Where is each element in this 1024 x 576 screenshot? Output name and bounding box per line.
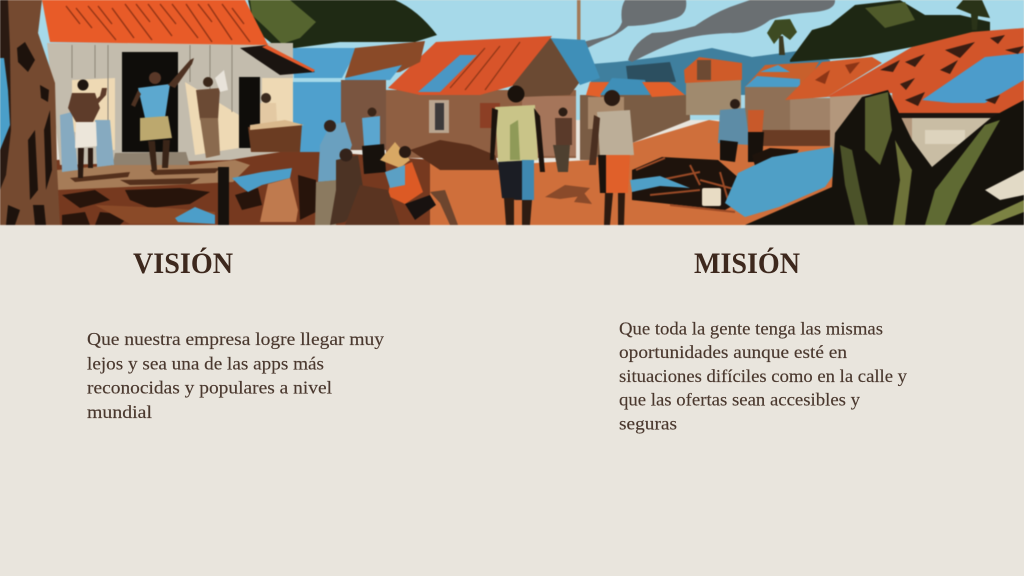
fence post	[218, 167, 229, 225]
trees behind houses, right	[790, 0, 990, 62]
palm tree	[767, 19, 797, 55]
body text: visión: reconocidas y populares a nivel	[87, 378, 332, 398]
dark mound behind tarp	[752, 148, 799, 166]
seated woman in orange	[345, 142, 458, 225]
person: man in blue shirt with raised arm	[131, 58, 194, 172]
porch steps	[113, 152, 190, 166]
yard shadow streaks	[70, 168, 220, 185]
jug	[702, 188, 721, 206]
body text: visión: lejos y sea una de las apps más	[87, 353, 324, 373]
orange mid house	[684, 57, 742, 115]
sack	[260, 178, 298, 222]
debris pile	[632, 157, 756, 212]
blue tarp scrap, left	[175, 207, 215, 224]
darker hill shade	[626, 62, 676, 82]
panel: visión	[87, 247, 384, 422]
sunlit wall patches	[72, 78, 293, 155]
body text: misión: oportunidades aunque esté en	[619, 342, 847, 362]
tree trunk	[0, 0, 60, 225]
person, brown, mid street	[553, 108, 572, 172]
blue scraps near sack	[232, 168, 292, 192]
big white house wall	[47, 43, 293, 165]
body text: misión: situaciones difíciles como en la calle y	[619, 366, 907, 386]
sky	[0, 0, 1024, 120]
man in orange shorts	[589, 90, 634, 225]
palm tree top right	[956, 0, 990, 30]
blue building	[292, 41, 425, 152]
body text: visión: Que nuestra empresa logre llegar muy	[87, 329, 384, 349]
blue tarp right	[725, 147, 837, 217]
illustration: damaged village street scene	[0, 0, 1024, 226]
yard sunlit planks	[57, 160, 250, 190]
person: carrying sack	[196, 70, 228, 158]
body text: misión: que las ofertas sean accesibles y	[619, 390, 860, 410]
trees behind houses, left	[248, 0, 437, 50]
body text: misión: Que toda la gente tenga las mismas	[619, 318, 883, 338]
heading: misión: MISIÓN	[694, 247, 800, 280]
group of people walking away	[718, 99, 764, 162]
blue tarp center	[630, 176, 690, 192]
ground: left yard	[56, 151, 431, 226]
man in yellow shirt and shorts	[490, 86, 545, 225]
group of seated people	[315, 120, 365, 225]
house with orange roof, right of street	[785, 57, 882, 130]
dark ground beside sack	[298, 175, 316, 220]
distant blue hills	[590, 48, 830, 95]
ground strip, brown far street	[760, 130, 832, 146]
rubble in front of central house	[410, 140, 500, 170]
person: man in white shorts	[68, 80, 107, 178]
house with blue and orange roof	[745, 62, 819, 130]
tree highlight right	[865, 2, 915, 28]
utility pole	[576, 0, 582, 40]
rocks on street	[545, 185, 592, 204]
body text: misión	[619, 318, 907, 433]
body text: visión: mundial	[87, 402, 152, 422]
far houses row	[580, 78, 690, 160]
body text: visión	[87, 329, 384, 422]
big orange roof	[42, 0, 268, 45]
roof overhang	[240, 45, 315, 75]
wall board lines	[71, 44, 233, 120]
yard dark blotches	[62, 188, 262, 225]
panel: misión	[619, 247, 907, 433]
heading: visión: VISIÓN	[133, 247, 233, 280]
ground: orange street	[430, 120, 850, 225]
table with vendor	[248, 93, 304, 152]
stacked blue boards	[60, 112, 114, 172]
central wooden house	[386, 36, 600, 158]
body text: misión: seguras	[619, 413, 677, 433]
large right house	[827, 27, 1024, 167]
person in blue, background	[362, 108, 386, 174]
main door	[122, 52, 178, 152]
tree foliage highlights	[250, 0, 316, 44]
foreground banana plant	[745, 90, 1024, 225]
smoke plumes	[568, 0, 835, 62]
second door	[239, 77, 260, 148]
yard orange-brown patches	[95, 205, 215, 224]
